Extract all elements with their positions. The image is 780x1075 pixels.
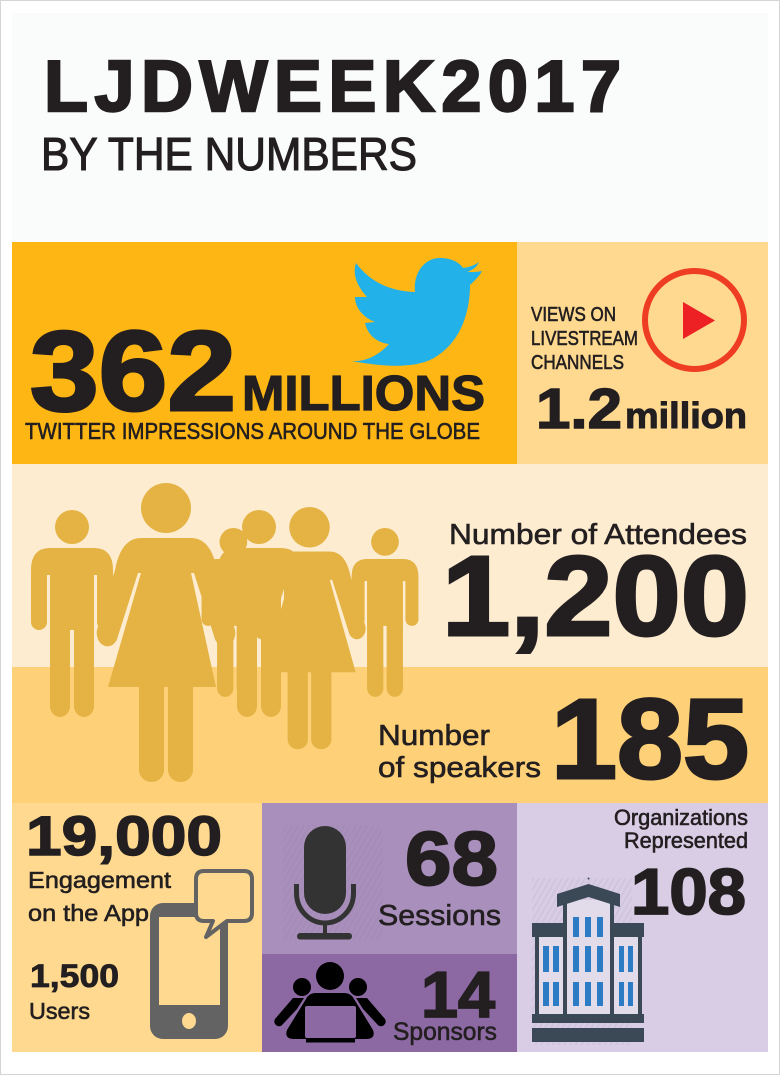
sessions label: Sessions bbox=[378, 900, 501, 932]
person: man behind bbox=[218, 510, 300, 717]
millions label: MILLIONS bbox=[242, 367, 485, 421]
title: LJDWEEK2017 bbox=[44, 47, 621, 127]
livestream caption: CHANNELS bbox=[531, 352, 624, 374]
organizations number: 108 bbox=[631, 855, 746, 928]
person: tall woman bbox=[97, 483, 235, 782]
icon: building bbox=[532, 878, 644, 1045]
icon: group at laptop bbox=[274, 962, 386, 1042]
sponsors number: 14 bbox=[421, 958, 495, 1031]
sponsors label: Sponsors bbox=[393, 1018, 497, 1046]
362 number: 362 bbox=[30, 308, 236, 434]
organizations label bbox=[614, 805, 748, 853]
person: man far left bbox=[31, 510, 113, 717]
person: woman centre bbox=[253, 507, 366, 749]
panel: sponsors bbox=[262, 954, 517, 1052]
panel: sessions bbox=[262, 803, 517, 954]
attendees label: Number of Attendees bbox=[449, 519, 747, 551]
header panel bbox=[12, 13, 768, 242]
panel: app engagement bbox=[12, 803, 262, 1052]
person: small man right bbox=[352, 528, 418, 697]
speakers label: of speakers bbox=[378, 752, 541, 784]
engagement label: on the App bbox=[28, 900, 149, 926]
users label: Users bbox=[29, 998, 90, 1024]
icon: play button bbox=[645, 271, 744, 369]
1.2 million number: 1.2 bbox=[536, 377, 622, 441]
icon: crowd of people bbox=[31, 483, 418, 782]
twitter caption: TWITTER IMPRESSIONS AROUND THE GLOBE bbox=[25, 418, 480, 444]
1.2 million number: million bbox=[625, 395, 747, 436]
livestream caption: VIEWS ON bbox=[531, 304, 616, 326]
organizations label: Organizations bbox=[614, 805, 748, 830]
icon: twitter bird bbox=[351, 258, 482, 366]
panel: twitter impressions bbox=[12, 242, 517, 464]
panel: speakers bbox=[12, 667, 768, 803]
person: small man centre bbox=[202, 528, 268, 697]
subtitle: BY THE NUMBERS bbox=[41, 128, 417, 180]
engagement number: 19,000 bbox=[26, 804, 222, 867]
attendees number: 1,200 bbox=[442, 533, 749, 659]
icon: microphone bbox=[283, 825, 383, 940]
livestream caption bbox=[531, 304, 638, 374]
livestream caption: LIVESTREAM bbox=[531, 328, 638, 350]
organizations label: Represented bbox=[624, 828, 748, 853]
sessions number: 68 bbox=[405, 817, 498, 902]
speakers label: Number bbox=[378, 720, 490, 752]
panel: livestream views bbox=[517, 242, 768, 464]
panel: attendees bbox=[12, 464, 768, 667]
speakers number: 185 bbox=[551, 676, 749, 802]
engagement label: Engagement bbox=[28, 867, 172, 893]
speakers label bbox=[378, 720, 541, 784]
users number: 1,500 bbox=[30, 958, 119, 994]
icon: phone with speech bubble bbox=[150, 871, 252, 1039]
1.2 million number bbox=[536, 377, 747, 441]
panel: organizations bbox=[517, 803, 768, 1052]
engagement label bbox=[28, 867, 172, 926]
